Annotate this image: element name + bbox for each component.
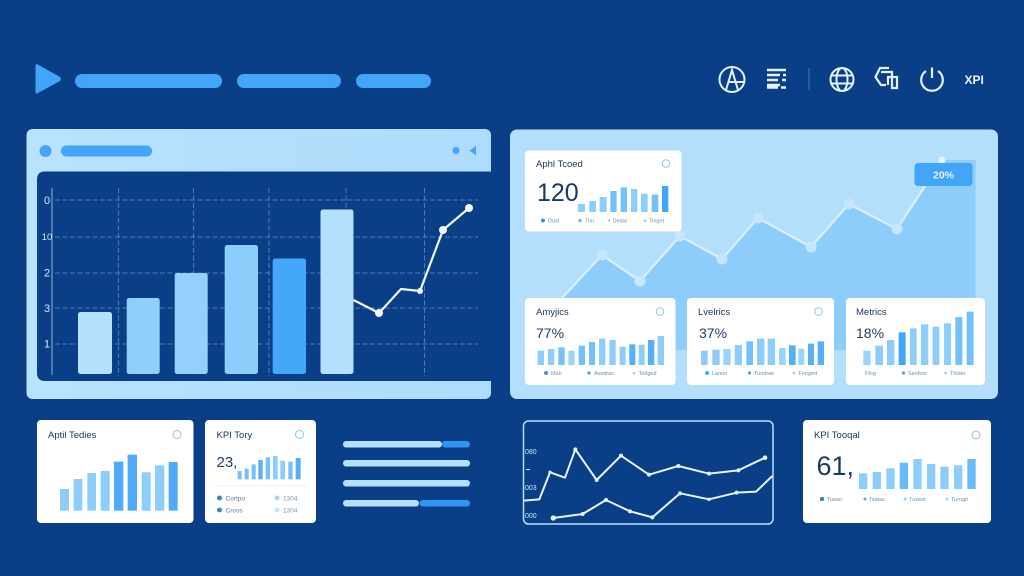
card legend: Avedrac bbox=[594, 371, 614, 377]
y axis labels: 2 bbox=[44, 268, 50, 280]
card legend: Ffog bbox=[865, 371, 876, 377]
card bars bbox=[538, 336, 664, 365]
card: KPI total bbox=[803, 420, 991, 523]
card legend: Fonged bbox=[798, 371, 817, 377]
header toolbar icons bbox=[720, 67, 984, 92]
card icon bbox=[662, 160, 670, 167]
icon: power bbox=[921, 68, 943, 91]
card legend: Tinget bbox=[649, 218, 665, 224]
card: April trend bbox=[525, 150, 682, 232]
card legend: Cross bbox=[226, 508, 243, 514]
card legend: Senfoor bbox=[908, 371, 927, 377]
upper line bbox=[523, 449, 765, 501]
card bars bbox=[701, 339, 824, 365]
tag placeholder bar bbox=[356, 74, 431, 88]
card title: Amyjics bbox=[536, 307, 569, 318]
card title: Metrics bbox=[856, 307, 887, 318]
subtitle placeholder bar bbox=[237, 74, 341, 88]
icon: circled A bbox=[720, 67, 745, 92]
divider bbox=[808, 68, 810, 90]
card legend: Lanon bbox=[712, 371, 727, 377]
card title: KPI Tooqal bbox=[814, 430, 860, 441]
card: bottom bar chart bbox=[37, 420, 194, 523]
y axis labels bbox=[42, 195, 52, 350]
card legend bbox=[820, 497, 968, 503]
value: 37% bbox=[699, 325, 727, 341]
lower line bbox=[553, 476, 772, 518]
card legend: Thider bbox=[950, 371, 966, 377]
big number: 61, bbox=[816, 451, 854, 481]
card title: Aphl Tcoed bbox=[536, 159, 583, 170]
trend line with nodes bbox=[562, 156, 946, 298]
panel background bbox=[510, 130, 998, 399]
panel background bbox=[26, 129, 491, 399]
chart frame bbox=[524, 421, 773, 524]
y axis labels bbox=[525, 449, 537, 520]
icon: export glyph bbox=[876, 68, 897, 88]
y axis labels: 000 bbox=[525, 513, 537, 520]
card legend: Tim bbox=[585, 218, 594, 224]
card legend bbox=[541, 218, 665, 224]
y axis labels: 0 bbox=[44, 195, 50, 207]
panel: trend overview with KPI cards bbox=[510, 130, 998, 399]
trend line bbox=[354, 204, 473, 317]
card bars bbox=[238, 456, 301, 479]
callout badge: 20% bbox=[933, 170, 955, 182]
card title: KPI Tory bbox=[216, 430, 252, 441]
card legend: Tsatas bbox=[869, 497, 885, 503]
y axis labels: 3 bbox=[44, 303, 50, 315]
y axis labels: 003 bbox=[525, 485, 537, 492]
progress bars bbox=[343, 441, 470, 506]
y axis labels: 10 bbox=[42, 232, 52, 243]
card legend: Man bbox=[551, 371, 562, 377]
card legend: Dust bbox=[548, 218, 560, 224]
card legend: Tundrae bbox=[754, 371, 774, 377]
area under trend line bbox=[540, 160, 976, 350]
value: 77% bbox=[536, 325, 564, 341]
card title: Lvelrics bbox=[698, 307, 730, 318]
line nodes bbox=[548, 447, 767, 521]
progress row 3 bbox=[343, 480, 470, 486]
card legend: Cortpo bbox=[226, 496, 245, 502]
card icon bbox=[656, 308, 664, 315]
progress row 2 bbox=[343, 460, 470, 466]
panel header bar bbox=[61, 146, 152, 156]
panel header controls bbox=[452, 146, 476, 156]
y axis line bbox=[51, 188, 53, 375]
card icon bbox=[972, 431, 980, 439]
card legend: Tuseot bbox=[909, 497, 926, 503]
divider bbox=[213, 485, 308, 487]
card legend bbox=[544, 371, 657, 377]
icon: list bbox=[767, 70, 786, 88]
chart area bbox=[37, 172, 491, 381]
card legend: Tiatao bbox=[827, 497, 842, 503]
value: 23, bbox=[216, 454, 237, 471]
title placeholder bar bbox=[75, 74, 222, 88]
card legend bbox=[865, 371, 966, 377]
progress row 4 bbox=[343, 500, 470, 506]
card: KPI today bbox=[205, 420, 316, 523]
panel: main bar and line chart bbox=[26, 129, 491, 399]
card legend: Turogit bbox=[951, 497, 968, 503]
card legend: Dedar bbox=[612, 218, 628, 224]
card icon bbox=[296, 430, 304, 438]
bars bbox=[78, 210, 354, 374]
card icon bbox=[173, 430, 181, 438]
progress row 1 bbox=[343, 441, 470, 448]
card legend bbox=[705, 371, 817, 377]
card bars bbox=[859, 459, 976, 489]
icon: play logo bbox=[36, 64, 61, 94]
chart grid bbox=[55, 188, 478, 376]
card title: Aptil Tedies bbox=[48, 430, 97, 441]
card: Metrics bbox=[846, 298, 985, 385]
card: Analytics bbox=[525, 298, 676, 385]
card bars bbox=[578, 186, 668, 212]
panel header dot bbox=[40, 145, 52, 157]
card bars bbox=[60, 455, 178, 511]
card legend: Tedged bbox=[638, 371, 657, 377]
y axis labels: 080 bbox=[525, 449, 537, 456]
value: 18% bbox=[856, 325, 884, 341]
icon: globe bbox=[830, 68, 854, 91]
line chart box bbox=[523, 421, 773, 524]
card: Lvelrics bbox=[687, 298, 834, 385]
card icon bbox=[815, 308, 822, 315]
card bars bbox=[863, 312, 974, 365]
y axis labels: 1 bbox=[44, 338, 50, 350]
card legend: 1304 bbox=[283, 496, 298, 502]
card legend bbox=[217, 496, 298, 514]
label: XPI: XPI bbox=[964, 73, 984, 87]
big number: 120 bbox=[537, 179, 579, 207]
card legend: 1304 bbox=[283, 508, 298, 514]
header logo and title bars bbox=[36, 64, 431, 94]
data lines bbox=[523, 447, 772, 521]
callout badge bbox=[914, 163, 972, 186]
